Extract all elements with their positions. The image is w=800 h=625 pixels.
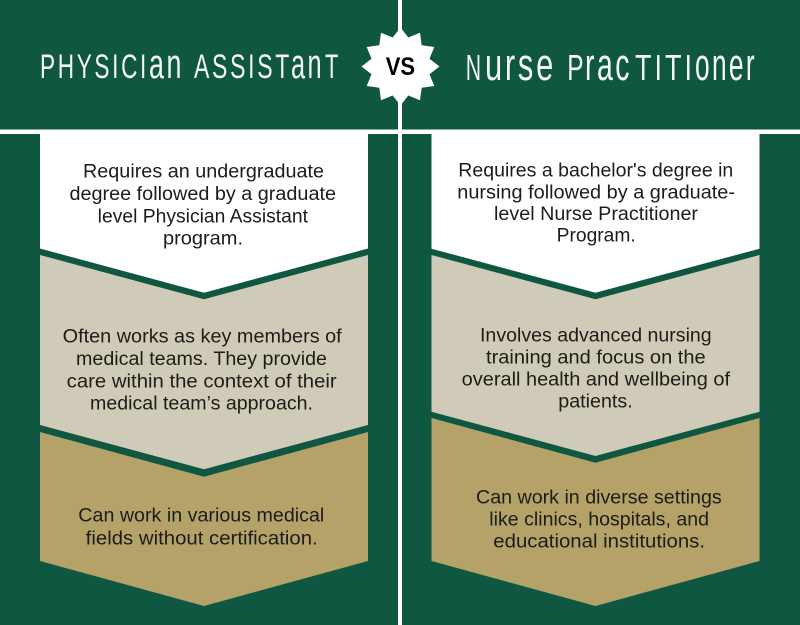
panel: NP training: Involves advanced nursing xyxy=(480,326,712,347)
title: Nurse Practitioner: N xyxy=(466,47,483,88)
title: Physician Assistant: T xyxy=(325,48,341,86)
title: Nurse Practitioner: rac xyxy=(585,39,632,90)
title: Nurse Practitioner: urse xyxy=(485,39,556,90)
panel: PA role: medical teams. They provide xyxy=(76,349,327,370)
panel: NP education: nursing followed by a graduate- xyxy=(457,182,735,204)
title: Physician Assistant: an xyxy=(149,40,184,87)
panel: PA education: level Physician Assistant xyxy=(98,206,309,228)
panel: PA education xyxy=(40,134,368,293)
badge: VS starburst: VS xyxy=(386,53,415,81)
panel: NP settings: educational institutions. xyxy=(493,532,705,553)
panel: PA role xyxy=(40,255,368,469)
panel: PA role: Often works as key members of xyxy=(63,327,342,348)
panel: NP education: Requires a bachelor's degree in xyxy=(458,161,733,182)
panel: NP training xyxy=(432,255,760,456)
panel: NP settings: like clinics, hospitals, and xyxy=(489,510,709,531)
title: Physician Assistant: ASSIST xyxy=(194,48,292,86)
panel: PA education: degree followed by a graduate xyxy=(70,184,336,205)
panel: physician assistant column xyxy=(40,134,368,606)
badge: VS starburst xyxy=(362,28,440,106)
panel: NP settings xyxy=(432,418,760,606)
panel: PA certification: fields without certification. xyxy=(86,528,318,549)
panel: NP education: level Nurse Practitioner xyxy=(494,204,699,225)
panel: NP training: training and focus on the xyxy=(486,348,706,368)
panel: PA certification: Can work in various medical xyxy=(78,506,324,527)
panel: NP settings: Can work in diverse settings xyxy=(476,487,722,508)
panel: PA education: program. xyxy=(163,228,243,250)
title: Nurse Practitioner: oner xyxy=(695,39,757,90)
title: Nurse Practitioner: TITI xyxy=(635,47,695,88)
panel: PA certification xyxy=(40,432,368,606)
panel: NP training: overall health and wellbeing of xyxy=(462,370,731,390)
title: Physician Assistant: PHYSICI xyxy=(40,48,149,86)
panel: NP education: Program. xyxy=(557,226,636,246)
panel: PA education: Requires an undergraduate xyxy=(83,162,324,182)
panel: nurse practitioner column xyxy=(432,134,760,606)
panel: NP education xyxy=(432,134,760,293)
title: Nurse Practitioner: P xyxy=(567,47,586,88)
panel: PA role: medical team’s approach. xyxy=(90,394,313,414)
panel: NP training: patients. xyxy=(558,391,633,412)
panel: PA role: care within the context of their xyxy=(67,372,337,392)
title: Physician Assistant: an xyxy=(291,40,324,87)
